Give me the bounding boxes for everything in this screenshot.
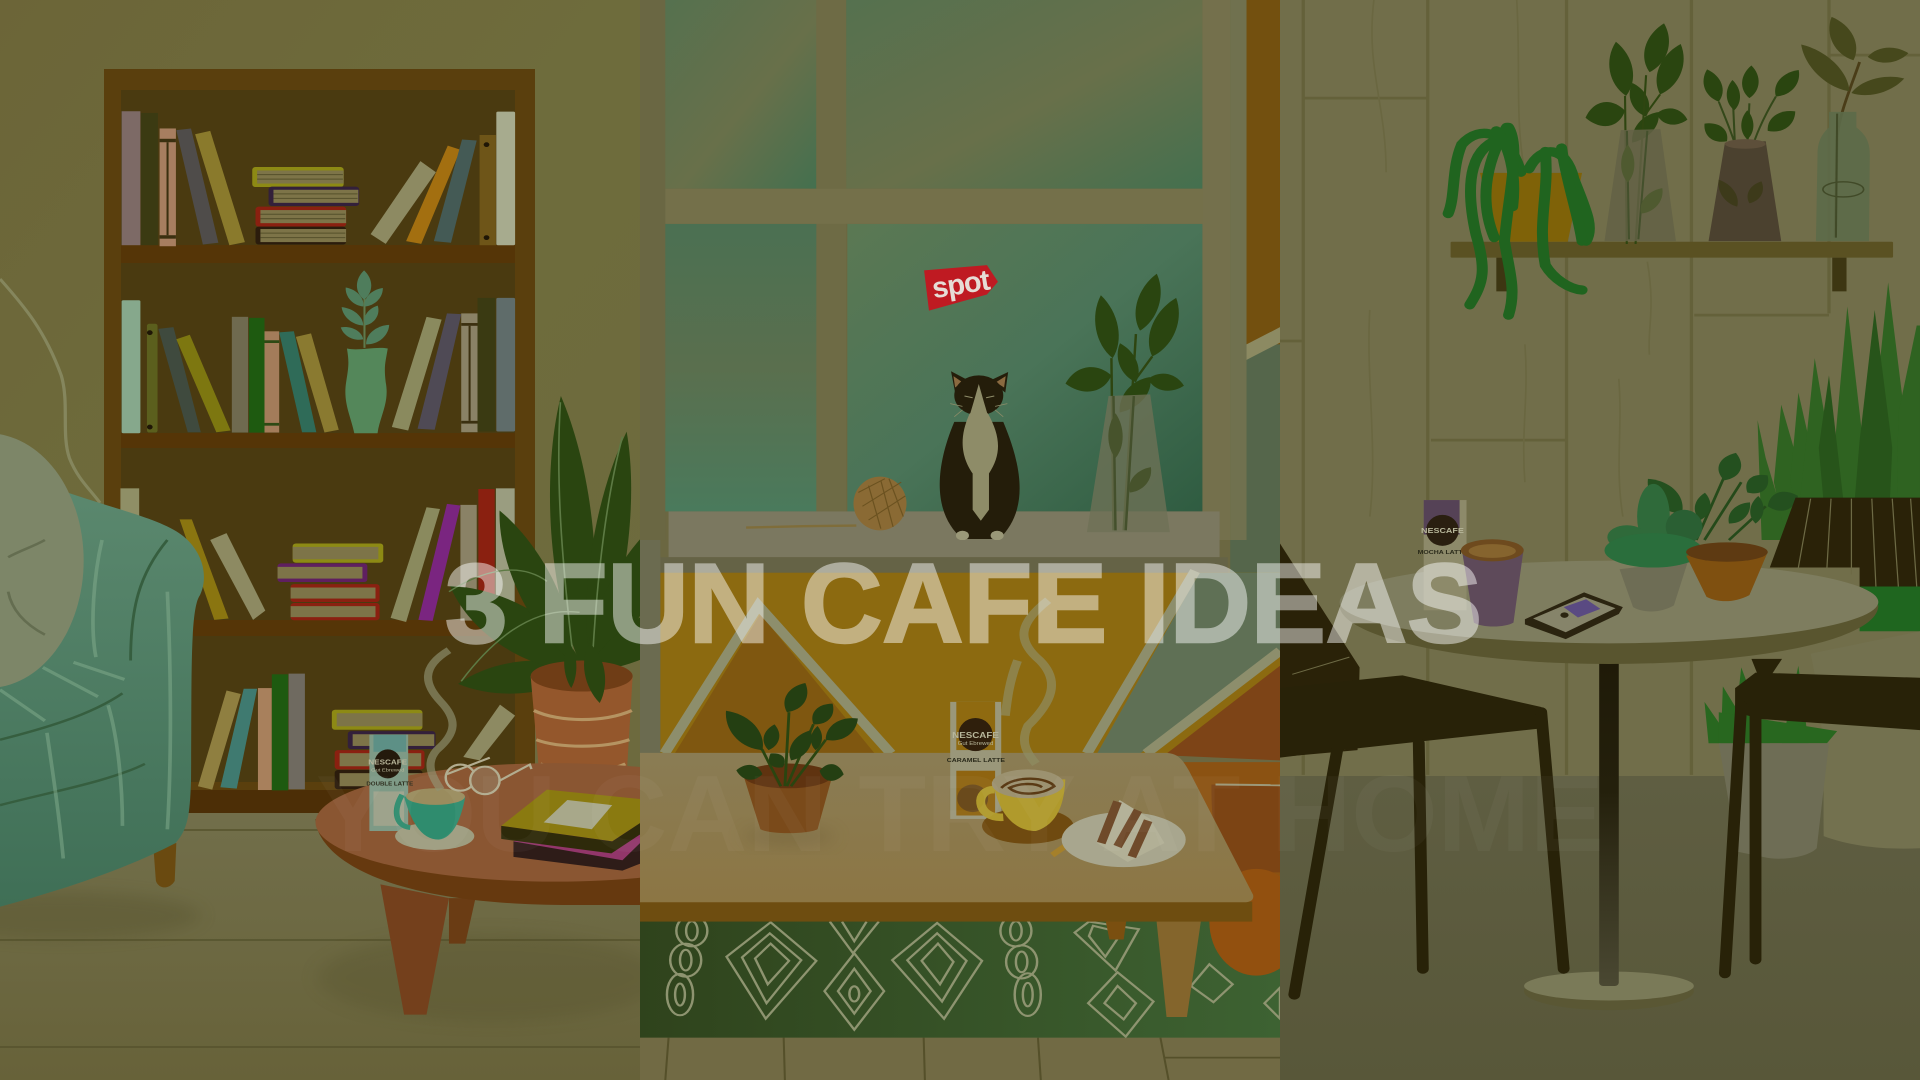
round table bbox=[1340, 561, 1878, 1010]
shadow on floor bbox=[0, 898, 182, 931]
floor cushion bbox=[1184, 762, 1280, 976]
teal coffee cup bbox=[395, 788, 474, 850]
grey pot bbox=[1604, 533, 1702, 611]
vase with leaves bbox=[1063, 272, 1188, 532]
logo: spot: spot bbox=[930, 264, 993, 305]
coffee sachet: caramel latte: NESCAFE bbox=[952, 731, 999, 740]
yarn ball bbox=[746, 477, 907, 530]
panel: plant cafe table bbox=[1280, 0, 1920, 1080]
hanging plant in yellow pot bbox=[1448, 127, 1589, 315]
title: 3 FUN CAFE IDEAS bbox=[445, 541, 1482, 666]
coffee sachet: double latte: Gut Ebrewed bbox=[371, 768, 404, 773]
bookcase bbox=[104, 69, 535, 813]
window panes bbox=[640, 0, 1280, 540]
coffee sachet: mocha latte: NESCAFE bbox=[1421, 526, 1464, 535]
wall mural bbox=[660, 571, 1280, 760]
books: lower shelves bbox=[0, 488, 661, 1022]
coffee sachet: caramel latte: CARAMEL LATTE bbox=[947, 758, 1006, 764]
coffee table bbox=[316, 763, 640, 1015]
coffee sachet: double latte: NESCAFE bbox=[368, 758, 407, 766]
books on table bbox=[501, 790, 640, 871]
vase on shelf bbox=[340, 270, 390, 434]
wooden table bbox=[640, 753, 1253, 1017]
items on round table bbox=[1418, 500, 1768, 639]
vases with leaves bbox=[1583, 13, 1909, 244]
orange pot bbox=[1686, 542, 1768, 601]
rug bbox=[640, 915, 1280, 1038]
coffee sachet: double latte: DOUBLE LATTE bbox=[366, 782, 413, 787]
purple coffee cup bbox=[1461, 539, 1524, 627]
subtitle: YOU CAN TRY AT HOME bbox=[316, 753, 1604, 875]
small leafy plants bbox=[1639, 450, 1802, 540]
spiky plant bbox=[1607, 282, 1920, 549]
steam: cup bbox=[428, 650, 453, 790]
coffee sachet: mocha latte: MOCHA LATTE bbox=[1418, 550, 1468, 556]
steam: yellow cup bbox=[1005, 600, 1052, 764]
steam on wall bbox=[0, 279, 100, 503]
books: upper shelves bbox=[120, 111, 515, 540]
yellow coffee cup bbox=[981, 769, 1073, 844]
glasses bbox=[446, 758, 531, 794]
armchair bbox=[0, 433, 204, 907]
mural wall and table scene bbox=[640, 540, 1303, 1080]
potted plant on table bbox=[726, 683, 858, 842]
chairs bbox=[1280, 543, 1920, 995]
coffee sachet: caramel latte: Gut Ebrewed bbox=[958, 741, 993, 747]
panel: window seat bbox=[640, 0, 1303, 1080]
cat bbox=[940, 371, 1020, 540]
wall planks bbox=[1280, 0, 1920, 775]
coffee sachet: caramel latte bbox=[947, 702, 1006, 819]
panel: library corner bbox=[0, 69, 640, 1048]
shelf bbox=[1451, 242, 1893, 291]
black planter and back plants bbox=[1704, 498, 1920, 859]
coffee sachet: mocha latte bbox=[1418, 500, 1468, 610]
potted plant bbox=[448, 396, 640, 766]
floor tiles bbox=[640, 1036, 1280, 1080]
cake slice on plate bbox=[1052, 800, 1186, 867]
phone bbox=[1525, 592, 1623, 639]
coffee sachet: double latte bbox=[366, 735, 413, 831]
